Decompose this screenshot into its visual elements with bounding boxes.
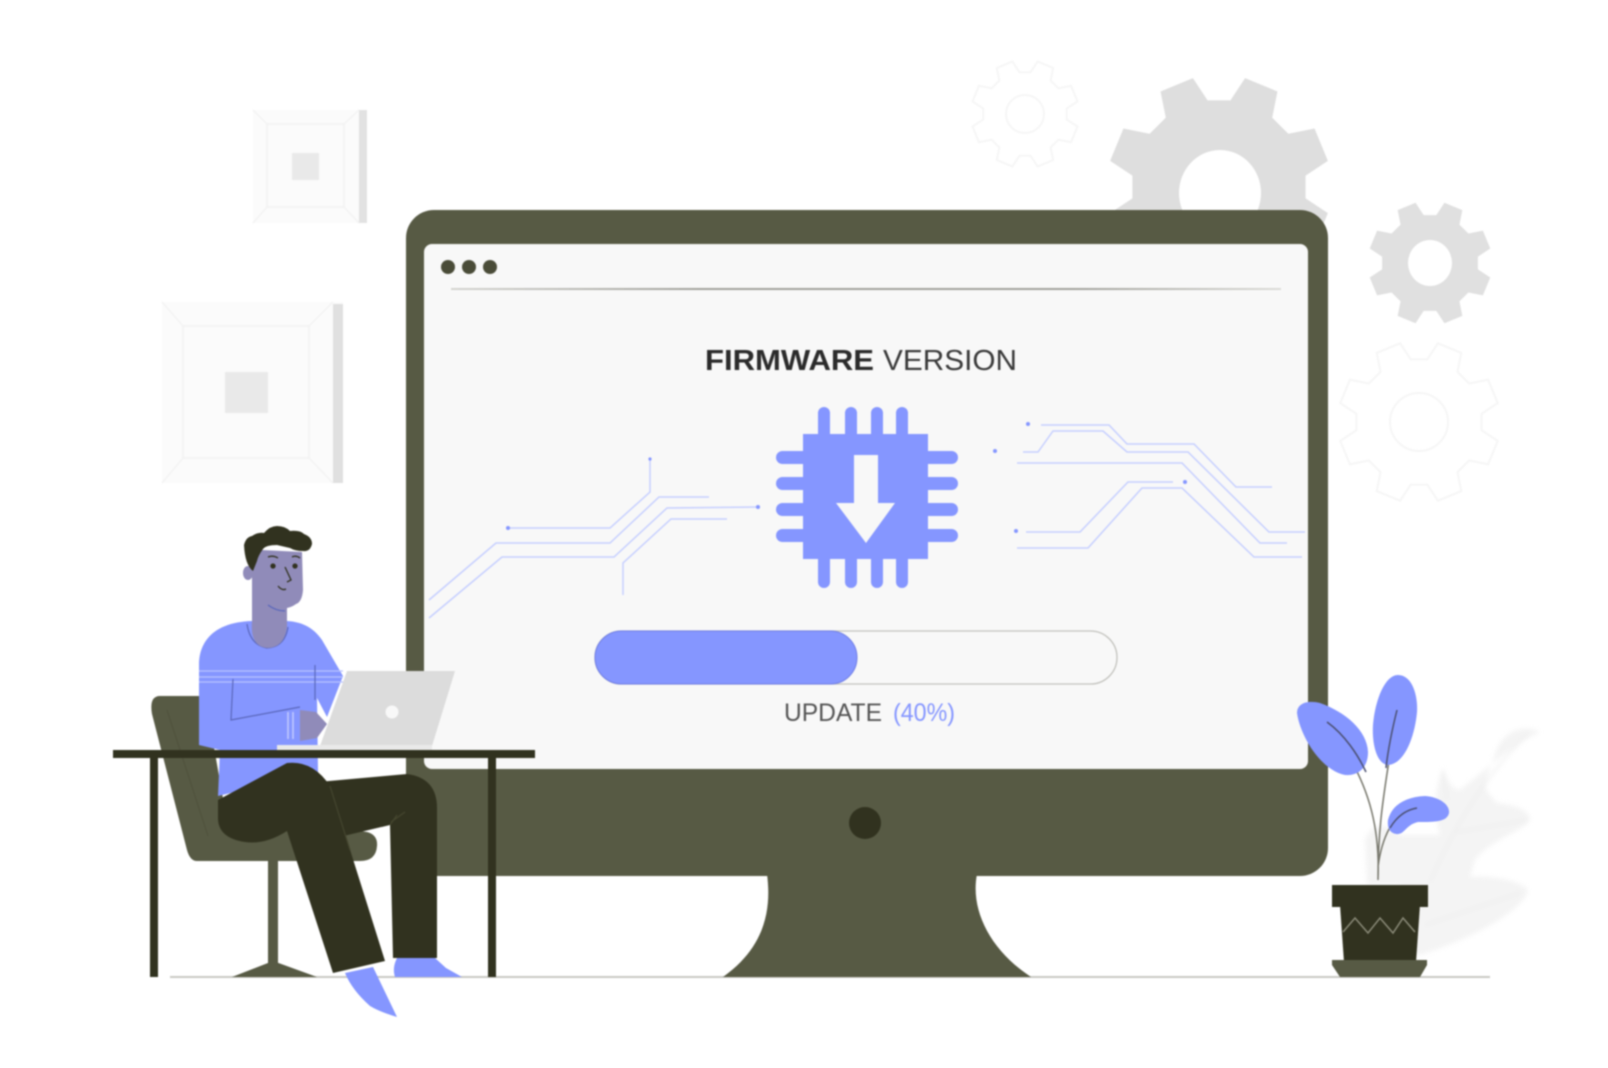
far leg (318, 774, 437, 958)
monitor camera (849, 807, 881, 839)
icon: outline gear top (973, 62, 1077, 166)
heading: firmware version: FIRMWARE (705, 345, 874, 377)
monitor (406, 210, 1328, 977)
progress label: UPDATE (784, 699, 882, 727)
icon: large filled gear (1110, 78, 1328, 296)
progress label (784, 699, 955, 727)
icon: outline gear lower (1340, 343, 1498, 501)
far shoe (394, 958, 462, 977)
person shirt (199, 621, 343, 796)
shirt cuff (288, 712, 293, 739)
near shoe (345, 967, 397, 1017)
laptop (277, 671, 455, 750)
circuit lines left (429, 457, 760, 618)
plant pot (1340, 905, 1420, 962)
window divider line (451, 288, 1281, 290)
potted plant (1297, 675, 1449, 977)
monitor stand (723, 874, 1031, 977)
heading: firmware version (705, 345, 1017, 377)
monitor screen (424, 244, 1308, 769)
icon: chip with download arrow (776, 407, 958, 588)
plant saucer (1332, 960, 1427, 977)
icon: small filled gear (1370, 203, 1490, 323)
person hand (300, 710, 327, 741)
heading: firmware version: VERSION (883, 345, 1017, 377)
person hair (244, 526, 312, 571)
shirt stripes (199, 671, 343, 682)
progress label: (40%) (893, 699, 955, 727)
person (199, 526, 462, 1017)
ground line (170, 976, 1490, 978)
circuit lines right (993, 422, 1305, 557)
near leg (218, 763, 385, 973)
shirt creases (231, 624, 315, 720)
leaf veins (1327, 710, 1417, 828)
window dots (441, 260, 497, 274)
person ear (243, 566, 253, 580)
chair (151, 696, 377, 977)
pot zigzag (1343, 918, 1415, 933)
plant leaves (1297, 675, 1449, 834)
monitor body (406, 210, 1328, 876)
leg crease (330, 786, 405, 850)
progress bar (595, 631, 1117, 684)
icon: large wall square (162, 302, 343, 483)
person face features (268, 556, 300, 611)
desk (113, 750, 535, 977)
background plant (1365, 729, 1540, 955)
icon: small wall square (253, 110, 367, 223)
person head and neck (252, 550, 303, 648)
plant stems (1345, 740, 1405, 880)
